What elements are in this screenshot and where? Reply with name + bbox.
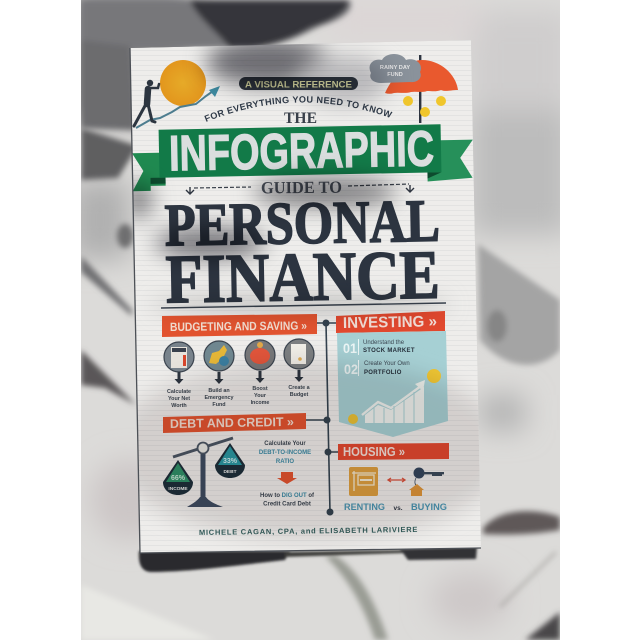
left weight: income [163, 460, 193, 495]
label: vs: vs. [393, 505, 403, 512]
step 02: Create Your Own [364, 361, 410, 367]
icon: rainy day umbrella [370, 54, 458, 123]
label: boost your income: Income [251, 400, 269, 406]
debt to income text: RATIO [276, 459, 294, 465]
panel: housing [338, 443, 449, 513]
book edge [130, 48, 481, 553]
label: calculate your net worth: Worth [171, 403, 187, 409]
right weight: debt: 33% [223, 458, 238, 465]
step 01: 01 [343, 340, 357, 356]
heading: INVESTING » [343, 313, 437, 332]
icon: large yellow coin [427, 369, 441, 383]
arrow: red down [277, 472, 297, 484]
fabric background [81, 0, 560, 640]
title word: personal: PERSONAL [164, 188, 440, 258]
photo of the book on white fabric [81, 0, 560, 640]
teal chevron panel [337, 331, 448, 437]
step 02 [344, 360, 410, 377]
icon: piggy bank [245, 340, 275, 383]
step 01: Understand the [363, 340, 405, 346]
icon: calculator [164, 342, 194, 384]
arrow: rent versus buy [388, 478, 405, 482]
label: build an emergency fund: Build an [208, 388, 230, 394]
book cover [130, 40, 481, 552]
authors line: MICHELE CAGAN, CPA, and ELISABETH LARIVIERE [199, 525, 418, 537]
green ribbon banner [132, 120, 474, 191]
umbrella canopy [385, 60, 458, 94]
chart: rising white arrow [362, 380, 425, 423]
icon: rainy day umbrella: FUND [387, 72, 403, 78]
step 02: 02 [344, 361, 358, 377]
badge: a visual reference: A VISUAL REFERENCE [245, 80, 352, 90]
label: calculate your net worth: Calculate [167, 389, 191, 395]
subtitle with dashed arrows [186, 181, 414, 195]
curved tagline: FOR EVERYTHING YOU NEED TO KNOW [204, 96, 392, 122]
icon: climbing figure [134, 80, 159, 126]
coins [403, 96, 413, 106]
icon: house key [409, 468, 444, 496]
connector timeline [305, 320, 339, 515]
icon: man pushing coin up arrow [134, 60, 220, 128]
fold shadows on the fabric [81, 128, 560, 640]
left weight: income: 66% [171, 475, 186, 482]
dig out text: Credit Card Debt [263, 502, 311, 508]
label: create a budget: Create a [288, 385, 311, 391]
panel: budgeting and saving [162, 314, 317, 409]
title word: finance: FINANCE [165, 237, 440, 317]
icon: emergency fund [204, 341, 234, 384]
icon: small yellow coin [348, 414, 358, 424]
icon: rainy day umbrella: RAINY DAY [380, 65, 410, 71]
icon: for rent sign [349, 467, 378, 496]
title word: the: THE [284, 110, 317, 127]
step 01: STOCK MARKET [363, 348, 415, 354]
dark shadow at the top of the photo [81, 0, 351, 130]
label: calculate your net worth: Your Net [168, 396, 190, 402]
icon: gold coin [160, 60, 206, 106]
right weight: debt: DEBT [223, 469, 237, 475]
title word: infographic: INFOGRAPHIC [169, 120, 435, 182]
label: boost your income: Your [254, 393, 267, 399]
label: create a budget: Budget [290, 392, 308, 398]
left weight: income: INCOME [168, 486, 188, 492]
label: build an emergency fund: Emergency [204, 395, 234, 401]
panel: debt and credit [163, 413, 315, 508]
label: buying: BUYING [411, 502, 447, 513]
debt to income text: Calculate Your [264, 441, 306, 447]
debt to income text: DEBT-TO-INCOME [259, 450, 311, 456]
soft light and shadow across the cover [110, 38, 510, 540]
heading: BUDGETING AND SAVING » [170, 319, 307, 334]
step 02: PORTFOLIO [364, 370, 402, 376]
label: build an emergency fund: Fund [212, 402, 226, 408]
right weight: debt [215, 443, 245, 478]
cloud [370, 54, 421, 83]
label: renting: RENTING [344, 502, 385, 513]
subtitle with dashed arrows: GUIDE TO [261, 178, 342, 197]
growth arrow [136, 89, 216, 128]
icon: budget document [284, 339, 314, 382]
label: boost your income: Boost [252, 386, 268, 392]
icon: balance scale [163, 438, 245, 507]
heading [162, 314, 317, 337]
heading: HOUSING » [343, 445, 405, 459]
step 01 [343, 339, 415, 356]
shadow under the book [139, 547, 477, 572]
dig out text: How to DIG OUT of [260, 493, 314, 499]
panel: investing [336, 311, 448, 437]
heading: DEBT AND CREDIT » [170, 415, 294, 431]
